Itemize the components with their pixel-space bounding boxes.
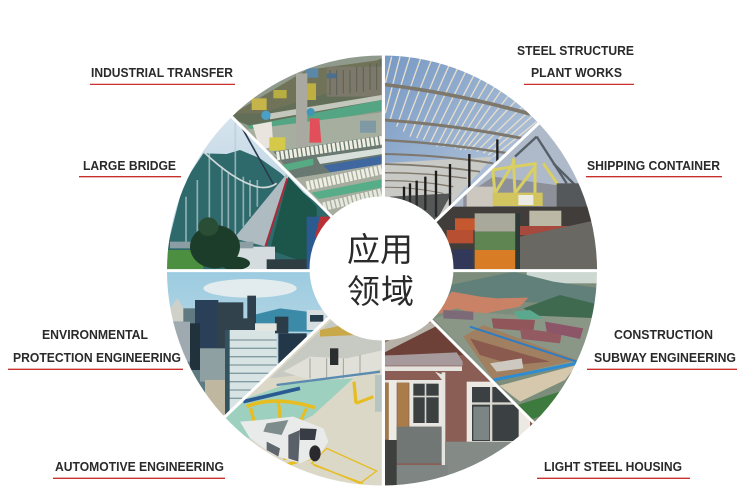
photo: automotive engineering [225,318,382,486]
photo: light steel housing [385,321,534,486]
label: shipping container: SHIPPING CONTAINER [587,158,721,173]
title line 1: 应用 [347,231,413,268]
photo: environmental protection engineering [167,272,328,416]
label: industrial transfer: INDUSTRIAL TRANSFER [91,65,234,80]
title line 2: 领域 [347,273,414,310]
label: steel structure plant works [517,43,634,84]
label: steel structure plant works: PLANT WORKS [531,65,622,80]
photo: construction subway engineering [430,270,600,425]
center circle with title [310,196,454,340]
photo: steel structure plant works [385,56,539,220]
label: light steel housing: LIGHT STEEL HOUSING [544,459,682,474]
label: environmental protection engineering: PROTECTION ENGINEERING [13,350,181,365]
panel: application circle [160,50,605,492]
photo: industrial transfer [232,56,382,216]
label: large bridge: LARGE BRIDGE [83,158,176,173]
photo: shipping container [436,124,597,270]
photo: large bridge [167,117,330,270]
label: steel structure plant works: STEEL STRUCTURE [517,43,634,58]
dividers [160,50,605,490]
label: environmental protection engineering: ENVIRONMENTAL [42,327,148,342]
label: automotive engineering: AUTOMOTIVE ENGINEERING [55,459,224,474]
label: construction subway engineering: CONSTRUCTION [614,327,713,342]
label: construction subway engineering: SUBWAY ENGINEERING [594,350,736,365]
label: environmental protection engineering [8,327,183,369]
label: construction subway engineering [587,327,737,369]
